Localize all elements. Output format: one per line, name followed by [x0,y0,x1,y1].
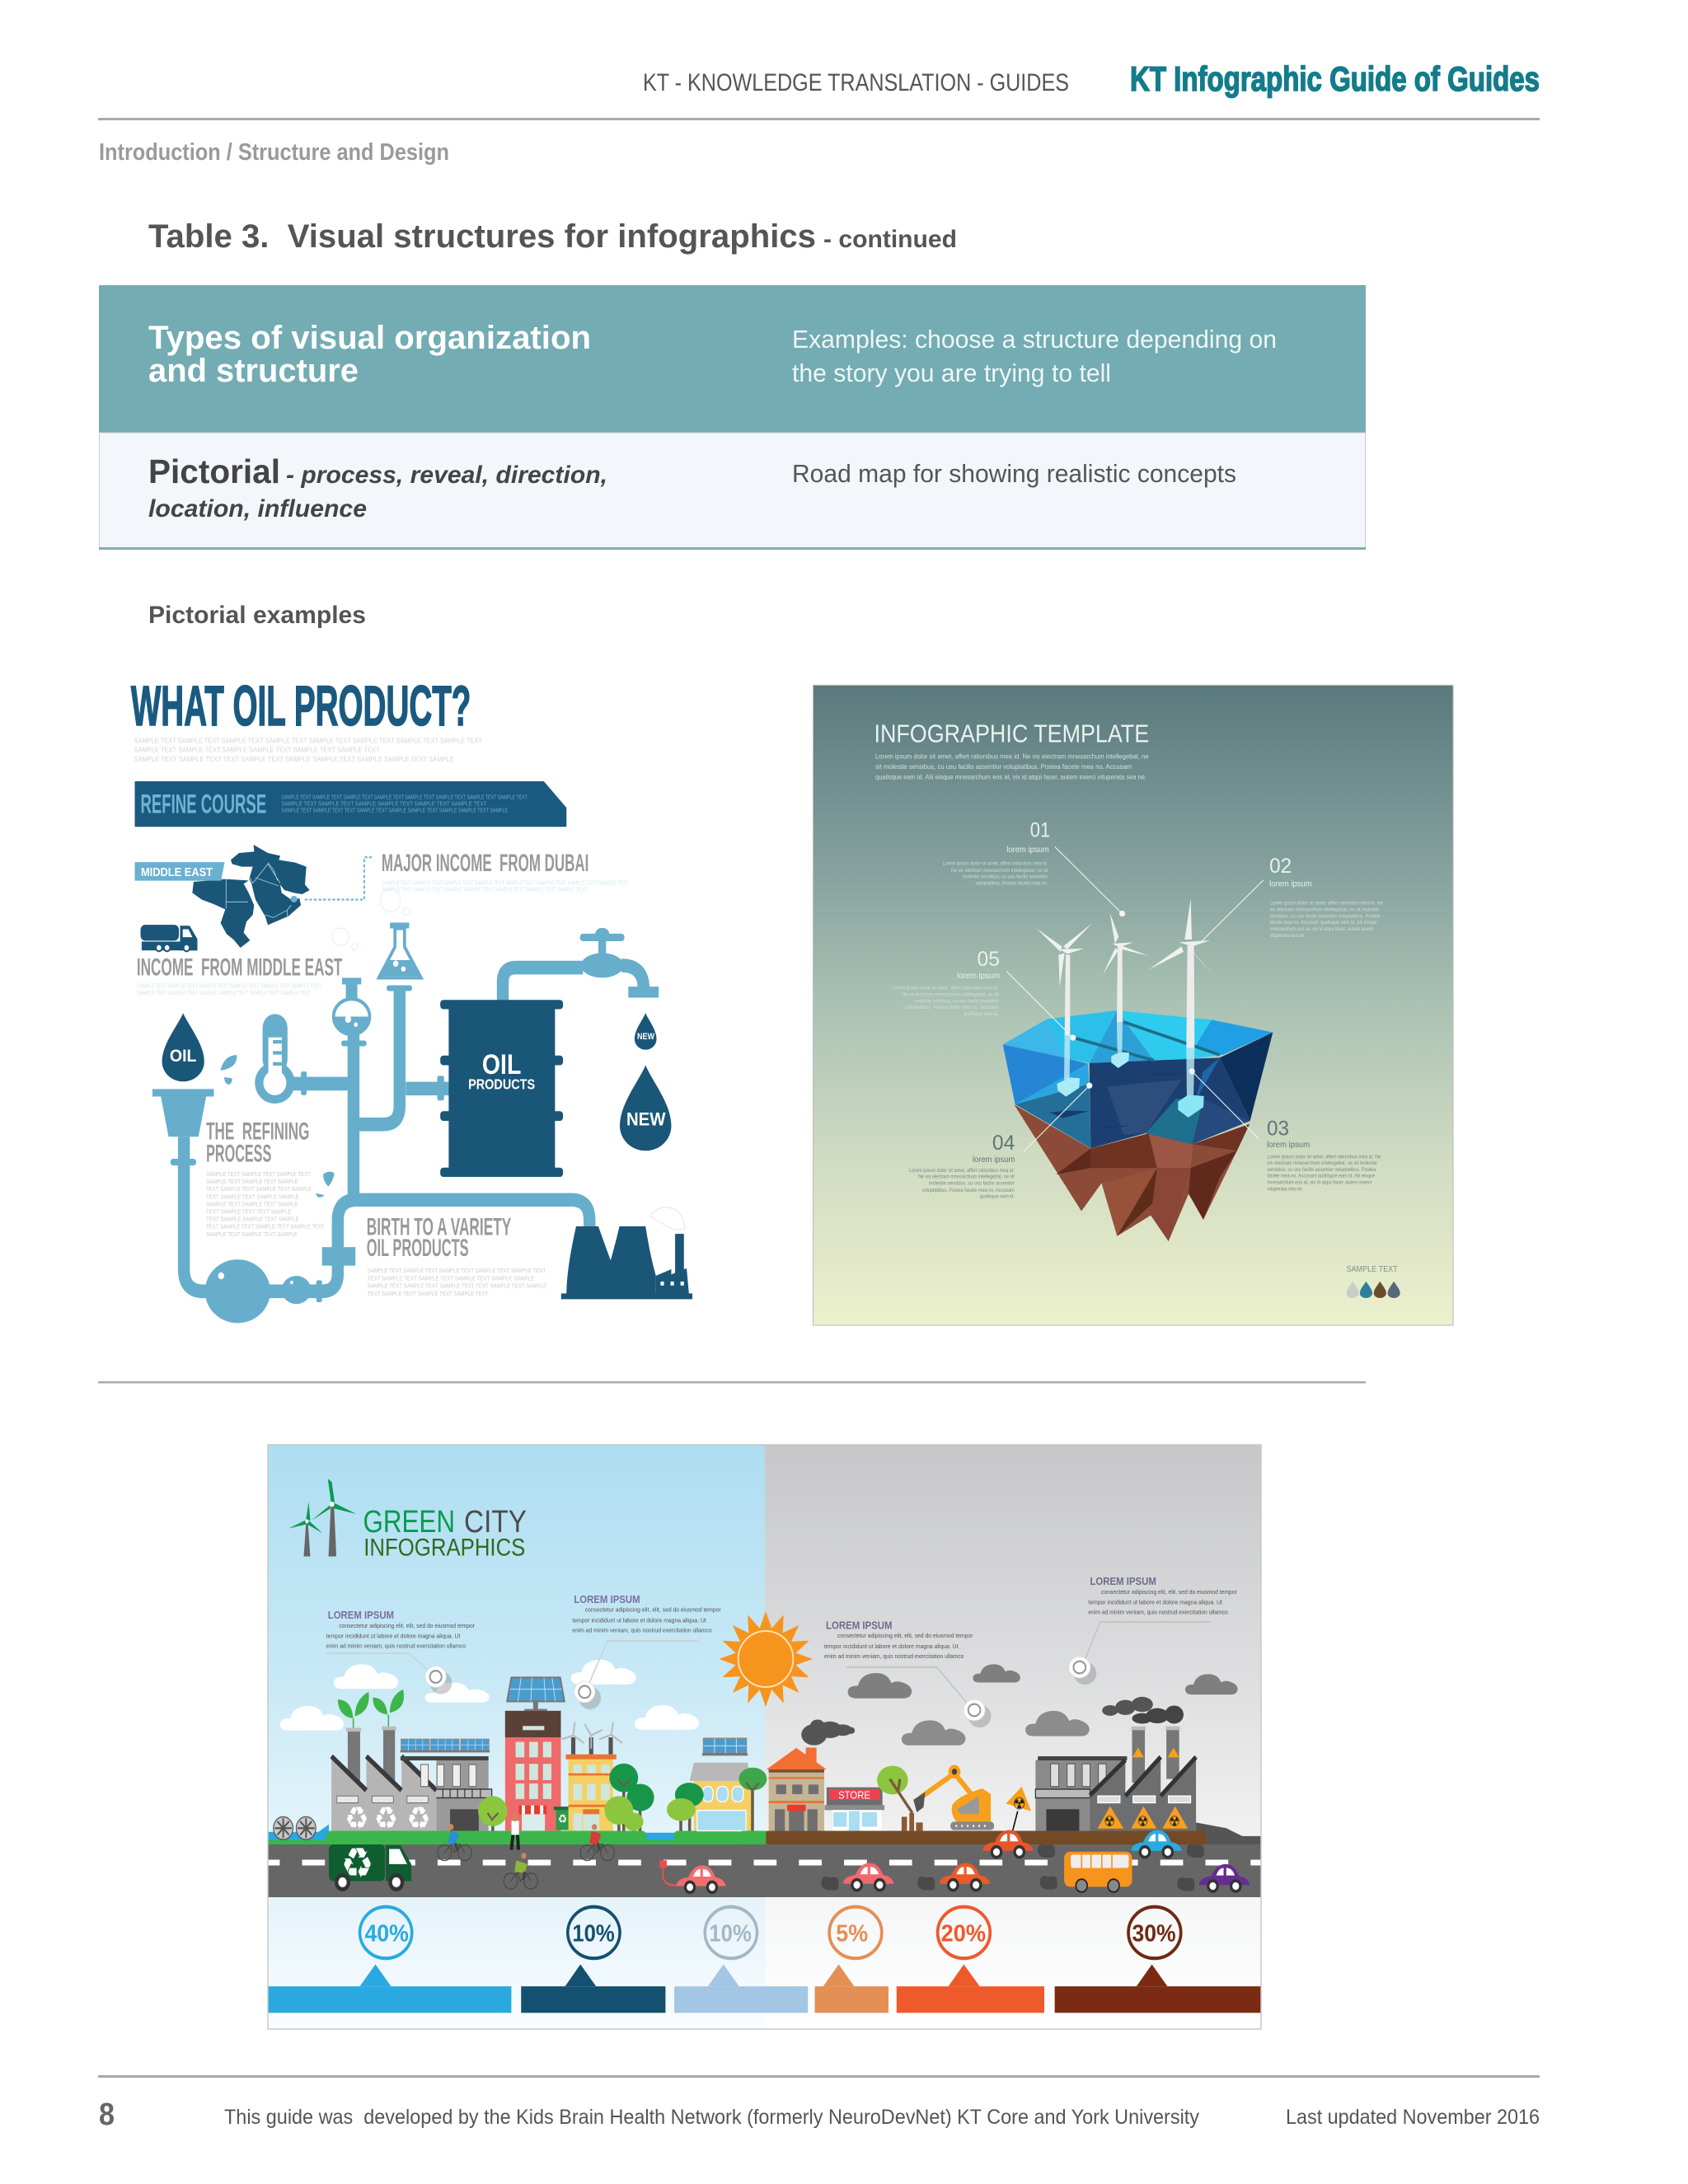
icon: oil barrel [440,1000,563,1177]
text: the refining process: SAMPLE TEXT SAMPLE TEXT SAMPLE [206,1231,298,1238]
recycling bin [554,1807,572,1830]
logo: green city infographics [288,1479,527,1561]
text: the refining process: SAMPLE TEXT SAMPLE TEXT SAMPLE [206,1179,298,1185]
clean factory [331,1727,436,1837]
oil title [131,674,482,763]
boiler spheres [205,1259,311,1323]
logo: green city infographics: GREEN [363,1505,455,1540]
road [268,1844,1261,1897]
cyclists and pedestrian [438,1815,614,1889]
icon: oil drop: OIL [170,1047,196,1066]
clean factory: ♻ [374,1801,398,1837]
text: income from middle east: SAMPLE TEXT SAMPLE TEXT SAMPLE SAMPLE TEXT SAMPLE TEXT SAMPLE TEXT [137,990,311,996]
oil title: SAMPLE TEXT SAMPLE TEXT SAMPLE SAMPLE TEXT SAMPLE TEXT SAMPLE TEXT [134,746,380,754]
callout: lorem ipsum 3 [824,1619,991,1727]
callout 02: 02 [1269,855,1292,878]
text: income from middle east: INCOME FROM MIDDLE EAST [137,954,342,981]
icon: oil barrel: OIL [482,1048,521,1080]
icon: faucet [580,928,659,998]
turbine towers [1064,945,1194,1102]
infographic: wind turbine island template [814,685,1453,1325]
callout 02 [1269,855,1383,939]
banner: refine course [135,781,566,827]
callout 04: 04 [992,1132,1015,1155]
callout 01: Lorem ipsum dolor sit amet, affert rationibus mea id. [943,860,1048,866]
callout: lorem ipsum 4: tempor incididunt ut labore et dolore magna aliqua. Ut [1088,1600,1222,1605]
sun [719,1611,813,1707]
callout 04: Ne vis electram mnesarchum intellegebat, ne sit [918,1174,1015,1180]
icon: large new drop: NEW [626,1109,666,1130]
text: birth to a variety: TEXT SAMPLE TEXT SAMPLE TEXT SAMPLE TEXT SAMPLE SAMPLE [368,1276,534,1282]
icon: round flask [334,977,369,1034]
callout: lorem ipsum 2: LOREM IPSUM [574,1593,640,1605]
callout 03: 03 [1267,1118,1289,1140]
text: birth to a variety [367,1213,546,1297]
house with chimney [767,1747,827,1830]
icon: large new drop [620,1065,671,1151]
grey clouds [848,1664,1238,1746]
callout: lorem ipsum 2 [572,1593,722,1709]
yellow house with solar roof [690,1738,753,1830]
callout 03 [1267,1118,1381,1192]
callout: lorem ipsum 4 [1069,1575,1238,1685]
text: the refining process: TEXT SAMPLE SAMPLE TEXT SAMPLE [206,1216,299,1223]
pipework [184,965,644,1291]
callout 03: lorem ipsum [1267,1141,1310,1150]
header [98,59,1540,120]
text: the refining process: SAMPLE TEXT SAMPLE TEXT SAMPLE [206,1202,298,1208]
text: the refining process: SAMPLE TEXT SAMPLE TEXT SAMPLE TEXT [206,1172,311,1178]
callout 02: facete mea no. Accusam qualisque eam id. Alii eisque [1270,920,1377,926]
callout: lorem ipsum 3: tempor incididunt ut labore et dolore magna aliqua. Ut [824,1644,959,1650]
text: major income from dubai: SAMPLE TEXT SAMPLE TEXT SAMPLE SAMPLE TEXT SAMPLE TEXT SAMPLE TEXT SAMPLE TEXT [382,887,587,893]
callout 05: qualisque eam id. [964,1011,999,1017]
template title: INFOGRAPHIC TEMPLATE [874,720,1149,748]
callout 04: lorem ipsum [973,1155,1015,1165]
table header row: Examples: choose a structure depending on [792,325,1277,354]
infographic: what oil product [131,674,692,1323]
banner: refine course: SAMPLE TEXT SAMPLE TEXT SAMPLE TEXT SAMPLE TEXT SAMPLE TEXT SAMPLE TEXT SAMPLE TEXT SAMPLE TEXT [281,794,528,801]
text: the refining process: PROCESS [206,1140,271,1167]
table body row [99,433,1366,550]
yellow building with turbines [562,1722,622,1830]
turbine blades [1037,899,1217,987]
percent bars left [268,1965,808,2013]
excavator [913,1765,994,1830]
callout 05: Lorem ipsum dolor sit amet, affert rationibus mea id. [892,986,999,991]
text: the refining process [206,1118,325,1238]
panel border [268,1445,1261,2029]
radiation warning sign: ☢ [1013,1794,1026,1814]
polluting factory: ☢ [1169,1813,1180,1830]
template title: sit molestie sensibus, cu usu facilis assentior voluptatibus. Postea facete mea no. Accusam [875,763,1132,771]
text: income from middle east [137,954,342,996]
callout 02: vituperata sea ne. [1270,933,1306,939]
table body row: location, influence [148,495,367,523]
solar office building [401,1739,492,1830]
text: the refining process: TEXT SAMPLE TEXT SAMPLE TEXT SAMPLE TEXT [206,1224,325,1230]
icon: oil drop [162,1013,204,1081]
stat: 5%: 5% [836,1920,868,1947]
sky and ground backgrounds [268,1445,1261,2029]
banner: refine course: SAMPLE TEXT SAMPLE TEXT SAMPLE SAMPLE TEXT SAMPLE TEXT SAMPLE TEXT [281,801,486,808]
callout: lorem ipsum 2: consectetur adipiscing elit, elit, sed do eiusmod tempor [585,1607,722,1614]
callout 03: mnesarchum eos at, vix id atqui facer, autem exerci [1268,1179,1372,1186]
callout 02: lorem ipsum [1269,880,1312,889]
text: birth to a variety: OIL PRODUCTS [367,1234,469,1261]
stat: 20%: 20% [941,1920,986,1947]
stat: 5% [829,1907,882,1958]
infographic: green city [268,1445,1261,2029]
recycling bin: ♻ [558,1812,567,1827]
callout 01: molestie sensibus, cu usu facilis assentior [963,874,1048,880]
footer: 8 [99,2097,115,2132]
table body row: Pictorial [148,452,280,490]
clean factory: ♻ [406,1801,431,1837]
stat: 20% [938,1907,990,1958]
callout: lorem ipsum 1: tempor incididunt ut labore et dolore magna aliqua. Ut [326,1633,461,1640]
callout: lorem ipsum 1: consectetur adipiscing elit, elit, sed do eiusmod tempor [339,1623,476,1629]
text: the refining process: TEXT SAMPLE TEXT SAMPLE SAMPLE [206,1194,299,1200]
callout 04: molestie sensibus, cu usu facilis assentior [929,1180,1015,1187]
text: the refining process: THE REFINING [206,1118,309,1145]
map: middle east [135,845,373,948]
table title: Table 3. Visual structures for infographics [148,218,816,255]
icon: refinery [561,1207,692,1299]
stat: 10% dark: 10% [572,1920,615,1947]
stat: 30%: 30% [1132,1920,1176,1947]
icon: small new drop [635,1013,657,1050]
footer [98,2075,1540,2132]
subheading: pictorial examples: Pictorial examples [148,602,366,629]
stat: 10% light [705,1907,757,1958]
callout leader lines [1006,847,1264,1152]
callout: lorem ipsum 3: enim ad minim veniam, quis nostrud exercitation ullamco [824,1654,964,1660]
template title: Lorem ipsum dolor sit amet, affert rationibus mea id. Ne vis electram mnesarchum intellegebat, ne [875,752,1149,760]
callout 03: Lorem ipsum dolor sit amet, affert rationibus mea id. Ne [1268,1155,1381,1160]
turbine bases [1057,1052,1204,1118]
cars, bus and exhaust [821,1830,1250,1893]
icon: thermometer [255,1014,295,1104]
text: the refining process: TEXT SAMPLE TEXT SAMPLE TEXT SAMPLE [206,1187,312,1193]
callout: lorem ipsum 4: LOREM IPSUM [1090,1575,1156,1587]
clean factory: ♻ [345,1801,368,1837]
template title: qualisque eam id. Alii eisque mnesarchum eos at, vix id atqui facer, autem exerci vituperata sea ne. [875,773,1146,780]
banner: refine course: SAMPLE TEXT SAMPLE TEXT TEXT SAMPLE TEXT SAMPLE SAMPLE TEXT SAMPLE SAMPLE TEXT SAMPLE [281,808,509,814]
table header row: and structure [148,353,359,389]
callout 01: voluptatibus. Postea facete mea no. [975,880,1048,887]
legend drops [1346,1265,1400,1298]
store: STORE [838,1789,870,1802]
stat: 10% dark [568,1907,620,1958]
header: KT - KNOWLEDGE TRANSLATION - GUIDES [643,69,1069,96]
table body row: - process, reveal, direction, [286,462,607,489]
table header row: Types of visual organization [148,320,591,356]
electric car [659,1860,726,1894]
store [824,1788,884,1830]
callout 01: Ne vis electram mnesarchum intellegebat, ne sit [951,868,1048,874]
plant leaves on chimneys [338,1690,404,1728]
splashes [220,1055,335,1197]
grass and water [268,1816,767,1844]
polluting factory: ☢ [1104,1813,1115,1830]
callout 02: vis electram mnesarchum intellegebat, ne sit molestie [1270,907,1379,912]
table [99,285,1366,550]
callout 02: sensibus, cu usu facilis assentior voluptatibus. Postea [1270,913,1381,919]
table header row: the story you are trying to tell [792,359,1111,387]
table body row: Road map for showing realistic concepts [792,459,1236,488]
polluting factory [1035,1727,1196,1830]
polluted side [742,1575,1261,2013]
text: birth to a variety: BIRTH TO A VARIETY [367,1213,511,1240]
trees [478,1764,767,1830]
icon: conical flask [332,889,421,977]
callout: lorem ipsum 4: consectetur adipiscing elit, elit, sed do eiusmod tempor [1101,1590,1238,1596]
callout 03: facete mea no. Accusam qualisque eam id. Alii eisque [1268,1174,1376,1179]
callout 05: voluptatibus. Postea facete mea no. Accusam [906,1005,999,1010]
oil title: SAMPLE TEXT SAMPLE TEXT SAMPLE TEXT SAMPLE TEXT SAMPLE TEXT SAMPLE TEXT SAMPLE TEXT SAMPLE TEXT [134,737,482,745]
radiation warning sign [1006,1787,1031,1830]
callout 01: lorem ipsum [1006,846,1049,855]
logo: green city infographics: INFOGRAPHICS [363,1534,525,1561]
legend drops: SAMPLE TEXT [1346,1265,1398,1274]
recycling truck: ♻ [341,1839,373,1888]
callout: lorem ipsum 4: enim ad minim veniam, quis nostrud exercitation ullamco [1088,1610,1228,1615]
oil title: SAMPLE TEXT SAMPLE TEXT TEXT SAMPLE TEXT SAMPLE SAMPLE TEXT SAMPLE SAMPLE TEXT SAMPLE [134,755,454,763]
logo: green city infographics: CITY [464,1505,527,1540]
template title [874,720,1149,780]
callout: lorem ipsum 3: LOREM IPSUM [826,1619,892,1632]
text: major income from dubai [382,849,628,893]
water facets [1003,1010,1273,1148]
stat: 10% light: 10% [709,1920,752,1947]
footer: This guide was developed by the Kids Brain Health Network (formerly NeuroDevNet) KT Core and York University [224,2106,1199,2129]
footer: Last updated November 2016 [1286,2106,1540,2129]
stat: 40%: 40% [364,1920,409,1947]
callout: lorem ipsum 3: consectetur adipiscing elit, elit, sed do eiusmod tempor [837,1633,973,1639]
gradient background [814,685,1453,1325]
text: major income from dubai: SAMPLE TEXT SAMPLE TEXT SAMPLE TEXT SAMPLE TEXT SAMPLE TEXT SAMPLE TEXT SAMPLE TEXT SAMPLE TEXT [382,880,628,887]
header: KT Infographic Guide of Guides [1130,59,1540,98]
polluting factory: ☢ [1137,1813,1149,1830]
funnel [152,1089,213,1137]
text: birth to a variety: SAMPLE TEXT SAMPLE TEXT SAMPLE TEXT TEXT SAMPLE TEXT SAMPLE [368,1283,546,1290]
island water and turbines [1003,899,1273,1148]
callout 03: vis electram mnesarchum intellegebat, ne sit molestie [1268,1160,1377,1166]
table header row [99,285,1366,433]
callout: lorem ipsum 1: LOREM IPSUM [328,1609,394,1621]
text: birth to a variety: SAMPLE TEXT SAMPLE TEXT SAMPLE TEXT SAMPLE TEXT SAMPLE TEXT [368,1268,546,1274]
green side [268,1479,808,2013]
callout 03: vituperata sea ne. [1268,1186,1303,1192]
callout 04: Lorem ipsum dolor sit amet, affert rationibus mea id. [909,1168,1015,1174]
callout 04: qualisque eam id. [980,1194,1015,1200]
callout: lorem ipsum 1: enim ad minim veniam, quis nostrud exercitation ullamco [326,1643,466,1650]
callout: lorem ipsum 2: tempor incididunt ut labore et dolore magna aliqua. Ut [572,1618,706,1624]
callout 05 [892,949,1000,1017]
text: income from middle east: SAMPLE TEXT SAMPLE TEXT SAMPLE TEXT SAMPLE TEXT SAMPLE TEXT SAMPLE TEXT [137,983,321,990]
callout 02: mnesarchum eos at, vix id atqui facer, autem exerci [1270,926,1374,932]
callout 01 [943,819,1050,887]
callout 05: molestie sensibus, cu usu facilis assentior [914,998,999,1004]
red building with solar roof [505,1677,565,1830]
clouds [280,1660,699,1731]
icon: tanker truck [141,925,197,951]
text: the refining process: TEXT SAMPLE TEXT TEXT SAMPLE [206,1209,292,1216]
percent bars right [815,1965,1261,2013]
banner: refine course: REFINE COURSE [141,790,266,819]
callout 03: sensibus, cu usu facilis assentior voluptatibus. Postea [1268,1167,1376,1173]
section label: Introduction / Structure and Design [99,139,449,166]
callout: lorem ipsum 1 [326,1609,476,1694]
icon: oil barrel: PRODUCTS [468,1076,535,1093]
callout 05: lorem ipsum [957,972,1000,981]
text: major income from dubai: MAJOR INCOME FROM DUBAI [382,849,588,876]
callout 04 [909,1132,1015,1200]
recycling truck [329,1839,411,1891]
brown ground [742,1822,1261,1844]
callout 04: voluptatibus. Postea facete mea no. Accusam [922,1188,1015,1193]
oil title: WHAT OIL PRODUCT? [131,674,471,738]
icon: small new drop: NEW [637,1032,654,1042]
stat: 30% [1128,1907,1181,1958]
felled tree and stumps [877,1765,923,1830]
callout 05: 05 [978,949,1000,971]
section divider [98,1381,1366,1383]
text: birth to a variety: TEXT SAMPLE TEXT SAMPLE TEXT SAMPLE TEXT [368,1291,489,1297]
callout 02: Lorem ipsum dolor sit amet, affert rationibus mea id. Ne [1270,901,1383,907]
smoke [801,1697,1184,1746]
table title: - continued [823,226,957,253]
callout: lorem ipsum 2: enim ad minim veniam, quis nostrud exercitation ullamco [572,1628,712,1634]
pipe fittings [171,986,444,1302]
callout 01: 01 [1030,819,1050,842]
map: middle east: MIDDLE EAST [141,865,213,879]
stat: 40% [360,1907,412,1958]
callout 05: Ne vis electram mnesarchum intellegebat, ne sit [902,991,999,997]
island rock facets [1014,1104,1250,1241]
